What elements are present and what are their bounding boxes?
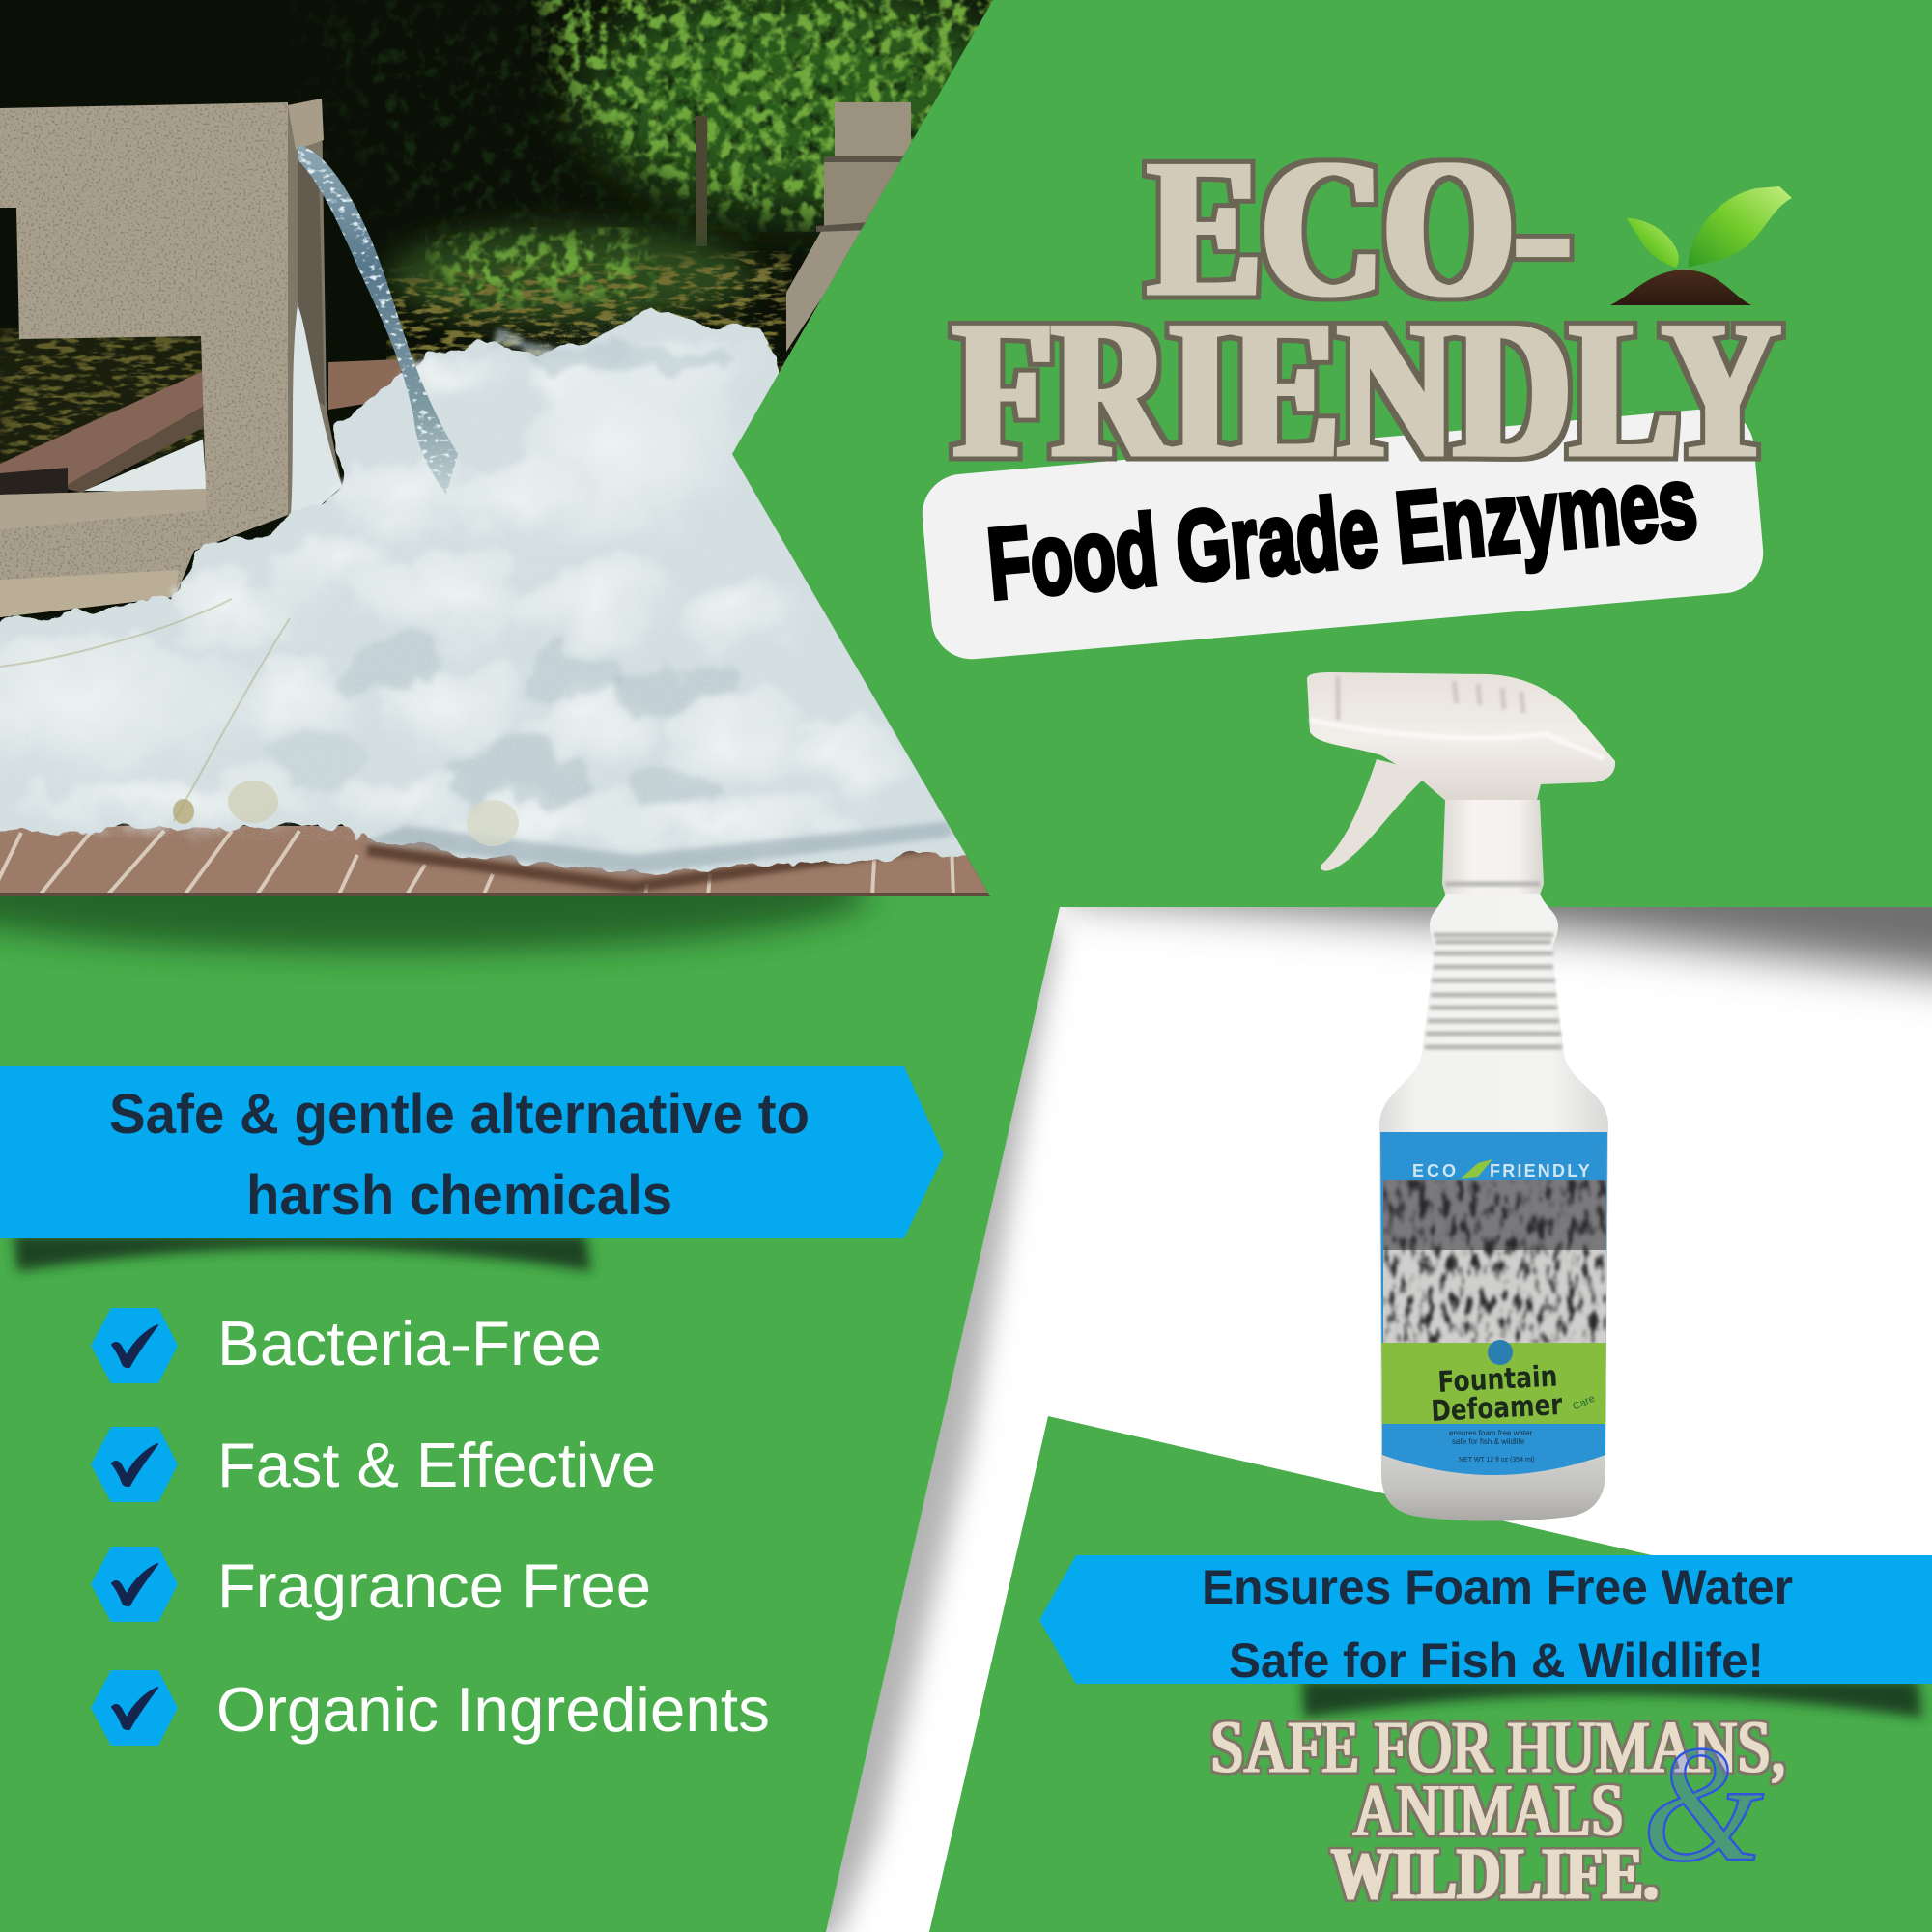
concrete block xyxy=(0,99,342,617)
benefit: organic ingredients: Organic Ingredients xyxy=(216,1674,770,1745)
shadow: left banner xyxy=(14,1235,591,1271)
tagline: safe for humans, animals and wildlife: & xyxy=(1642,1713,1764,1896)
benefit: fast and effective: Fast & Effective xyxy=(217,1430,656,1500)
bottle label xyxy=(1380,1132,1607,1475)
banner: safe and gentle alternative: Safe & gentle alternative to xyxy=(109,1083,810,1146)
tagline: safe for humans, animals and wildlife: ANIMALS xyxy=(1353,1770,1624,1851)
white tag: food grade enzymes xyxy=(919,405,1767,663)
banner: ensures foam free water xyxy=(1039,1555,1932,1688)
title: eco-friendly: ECO- xyxy=(1149,120,1571,338)
foam mass xyxy=(0,307,1005,874)
icon: sprout in soil xyxy=(1610,186,1792,305)
bottle label: Care xyxy=(1571,1393,1597,1413)
photo: foam overflowing fountain xyxy=(0,0,1024,898)
benefit: fragrance free: Fragrance Free xyxy=(217,1550,651,1621)
bottle label: Defoamer xyxy=(1431,1388,1563,1429)
product bottle xyxy=(1307,672,1615,1520)
bottle label: Fountain xyxy=(1437,1360,1558,1400)
brick low wall and water pool xyxy=(0,359,401,497)
bottle label: FRIENDLY xyxy=(1490,1161,1592,1180)
panel: lower left green xyxy=(0,896,1060,1932)
bottle body xyxy=(1379,894,1608,1520)
banner: ensures foam free water: Safe for Fish & Wildlife! xyxy=(1229,1634,1764,1688)
tagline: safe for humans, animals and wildlife: WILDLIFE. xyxy=(1331,1833,1659,1915)
title: eco-friendly xyxy=(954,120,1779,498)
bottle trigger xyxy=(1321,759,1430,871)
bottle collar xyxy=(1442,800,1544,900)
shadow: right banner xyxy=(1302,1680,1922,1718)
banner: ensures foam free water: Ensures Foam Free Water xyxy=(1202,1560,1793,1614)
benefit: bacteria-free xyxy=(91,1308,602,1383)
falling water stream xyxy=(298,145,458,495)
bottle spray head xyxy=(1307,672,1615,804)
bottle label: safe for fish & wildlife xyxy=(1452,1437,1525,1446)
right column of fountain xyxy=(786,102,918,352)
tagline: safe for humans, animals and wildlife: SAFE FOR HUMANS, xyxy=(1210,1707,1786,1788)
bottle base xyxy=(1381,1439,1605,1520)
banner: safe and gentle alternative xyxy=(0,1066,944,1238)
bottle label: ECO xyxy=(1412,1161,1459,1180)
banner: safe and gentle alternative: harsh chemicals xyxy=(246,1164,672,1227)
tagline: safe for humans, animals and wildlife xyxy=(1210,1707,1786,1915)
panel: lower right green xyxy=(929,1416,1932,1932)
panel: top right green xyxy=(732,0,1932,907)
shadow below photo xyxy=(0,836,869,952)
bottle neck ribs xyxy=(1425,884,1562,1047)
brick floor xyxy=(0,826,995,898)
bottle label: ensures foam free water xyxy=(1449,1429,1533,1437)
foam column below spout xyxy=(291,304,342,515)
bottle label: NET WT 12 fl oz (354 ml) xyxy=(1459,1457,1535,1463)
shadows on white area xyxy=(826,907,1932,1932)
benefit: bacteria-free: Bacteria-Free xyxy=(217,1308,602,1378)
